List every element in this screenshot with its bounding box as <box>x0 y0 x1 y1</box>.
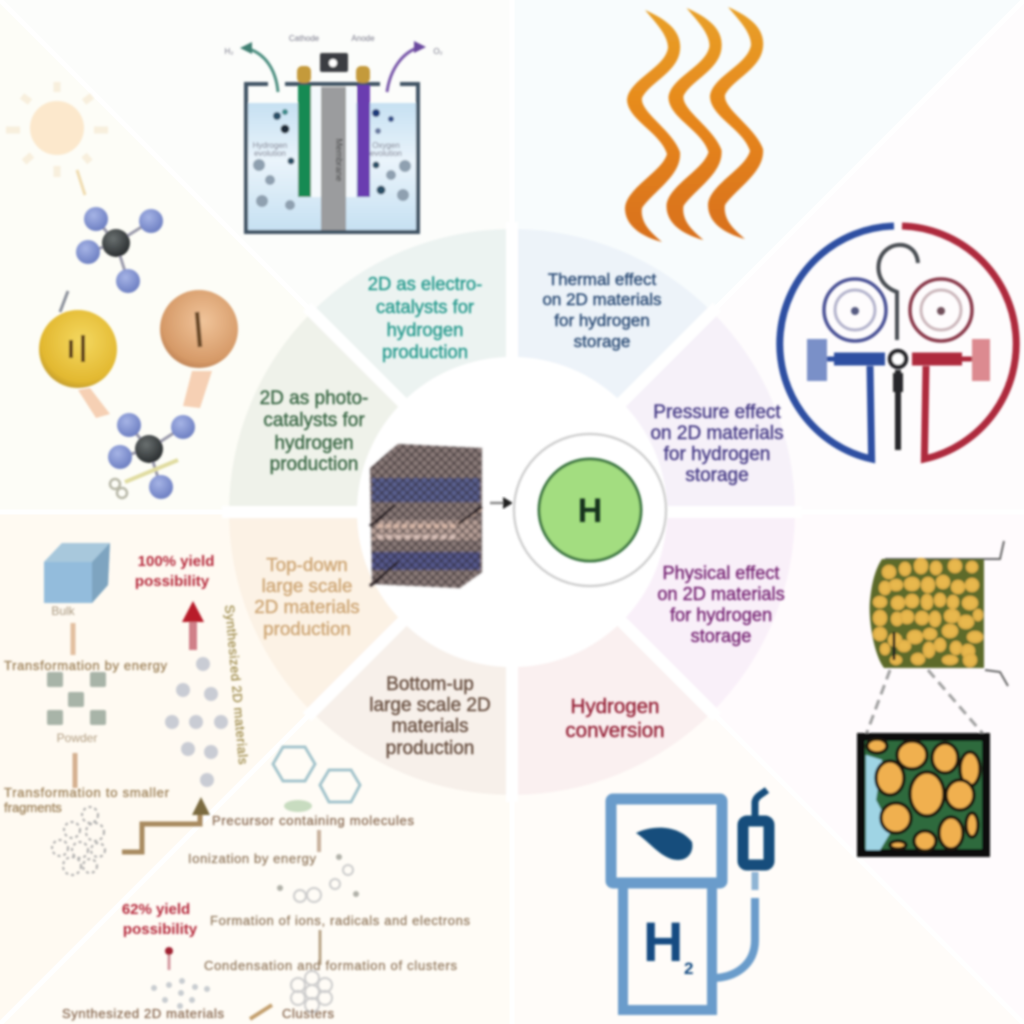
panel: electrolysis cell: Membrane <box>334 138 344 182</box>
segment text: top-down: Top-down <box>266 554 348 575</box>
segment text: pressure effect: for hydrogen <box>664 444 770 465</box>
anode <box>357 85 370 197</box>
powder <box>47 672 106 725</box>
cell labels: O₂ <box>433 47 443 56</box>
bulk label: Bulk <box>51 604 76 618</box>
magnified square <box>861 737 986 853</box>
segment text: physical effect: storage <box>691 626 751 646</box>
62% yield label: possibility <box>123 921 198 938</box>
ionization label: Ionization by energy <box>188 851 316 866</box>
leaf <box>636 828 692 860</box>
grey dots <box>165 657 228 787</box>
62% yield label: 62% yield <box>122 901 190 918</box>
segment text: electrocatalysts: 2D as electro- <box>368 273 482 294</box>
segment text: photocatalysts: 2D as photo- <box>260 388 368 409</box>
cathode <box>298 85 311 197</box>
arrow: O2 <box>387 47 420 92</box>
segment text: bottom-up: Bottom-up <box>386 674 474 695</box>
ring of eight topic segments <box>222 222 802 802</box>
membrane <box>321 87 346 232</box>
cell labels: Hydrogen <box>253 141 287 150</box>
cell labels: Cathode <box>289 34 320 43</box>
icon: hydrogen atom: H <box>578 492 602 530</box>
icon: heat waves <box>625 7 763 242</box>
condensation label: Condensation and formation of clusters <box>204 958 458 973</box>
icon: hydrogen fuel pump <box>611 790 769 1010</box>
hook and stem <box>878 245 918 450</box>
cell labels: evolution <box>370 149 402 158</box>
segment text: bottom-up: materials <box>391 716 469 737</box>
panel: top-down production flow <box>4 543 251 875</box>
arrow <box>70 623 76 655</box>
brown arrow <box>250 1005 272 1019</box>
segment text: pressure effect: on 2D materials <box>650 423 784 444</box>
cell labels: H₂ <box>225 47 233 56</box>
segment text: electrocatalysts: catalysts for <box>376 296 474 317</box>
smaller fragments label: fragments <box>4 800 62 815</box>
segment text: hydrogen conversion: Hydrogen <box>571 695 659 718</box>
sun <box>6 82 108 177</box>
segment text: top-down: production <box>263 618 351 639</box>
segment text: thermal effect: for hydrogen <box>554 311 650 330</box>
arrow: stack to hydrogen <box>490 497 513 509</box>
precursor small molecule <box>284 800 312 812</box>
peach arrows <box>78 371 212 418</box>
H2 subscript: 2 <box>684 959 693 978</box>
electrode caps <box>297 66 370 83</box>
arrow: H2 <box>245 48 278 92</box>
segment text: top-down: large scale <box>262 575 352 596</box>
ions and radicals <box>277 854 359 902</box>
segment text: bottom-up: large scale 2D <box>369 695 491 716</box>
orange sphere <box>160 290 238 368</box>
synthesized label: Synthesized 2D materials <box>62 1006 224 1021</box>
segment text: physical effect: on 2D materials <box>657 584 785 604</box>
smaller fragments label: Transformation to smaller <box>4 785 170 800</box>
cell walls <box>246 84 418 232</box>
segment text: physical effect: Physical effect <box>663 563 779 583</box>
centre: layered 2D material stack <box>370 444 482 588</box>
segment text: top-down: 2D materials <box>254 596 360 617</box>
panel: electrolysis cell <box>225 34 443 232</box>
nozzle <box>743 790 769 865</box>
bubbles <box>273 109 394 194</box>
segment text: photocatalysts: catalysts for <box>263 410 365 431</box>
rotated synthesized label: Synthesized 2D materials <box>222 604 251 765</box>
battery <box>320 53 348 72</box>
segment text: pressure effect: storage <box>685 465 749 486</box>
granule block <box>870 541 1008 686</box>
segment text: thermal effect: Thermal effect <box>548 270 656 289</box>
zoom dashed lines <box>866 670 984 735</box>
cell labels <box>225 34 443 158</box>
formation label: Formation of ions, radicals and electrons <box>210 913 470 928</box>
clusters label: Clusters <box>282 1006 334 1021</box>
segment text: physical effect: for hydrogen <box>670 605 772 625</box>
arrow <box>72 753 78 788</box>
synthesized dots <box>151 978 210 1009</box>
scissors <box>110 460 178 498</box>
cell labels: Anode <box>351 34 375 43</box>
pump body <box>611 799 755 1010</box>
transformation label: Transformation by energy <box>4 658 168 673</box>
icon: pressure manifold gauge <box>780 226 1016 459</box>
precursor label: Precursor containing molecules <box>212 813 414 828</box>
segment text: electrocatalysts: production <box>382 341 468 362</box>
segment text: hydrogen conversion: conversion <box>565 719 665 742</box>
100% yield label: possibility <box>135 573 210 590</box>
precursor hexagons <box>273 747 360 802</box>
molecule: after <box>108 413 195 499</box>
segment text: thermal effect: storage <box>574 332 630 351</box>
molecule: before <box>76 207 163 293</box>
powder label: Powder <box>57 731 97 745</box>
light ray arrow <box>77 170 85 195</box>
cell labels: evolution <box>254 149 286 158</box>
panel: photocatalysis <box>6 82 238 499</box>
yellow sphere <box>39 291 117 388</box>
bulk cube <box>44 543 110 603</box>
connector <box>318 930 322 965</box>
segment text: photocatalysts: production <box>270 454 358 475</box>
fragments dots <box>52 807 105 875</box>
segment text: bottom-up: production <box>386 738 474 759</box>
segment text: photocatalysts: hydrogen <box>274 433 354 454</box>
clusters <box>291 971 332 1012</box>
panel: bottom-up production flow <box>62 747 470 1021</box>
segment text: thermal effect: on 2D materials <box>542 290 662 309</box>
cell labels: Oxygen <box>372 141 400 150</box>
stair arrow <box>122 797 210 852</box>
segment text: pressure effect: Pressure effect <box>653 402 781 423</box>
100% yield label: 100% yield <box>138 553 214 570</box>
icon: hydrogen atom <box>514 434 666 586</box>
connector <box>317 830 321 852</box>
blue side <box>780 226 894 459</box>
small red arrow <box>165 947 173 970</box>
icon: porous material <box>861 541 1008 853</box>
white gaps beside membrane <box>311 87 356 197</box>
red arrow <box>182 601 204 650</box>
H2 label: H <box>643 910 683 973</box>
red side <box>902 226 1016 459</box>
segment text: electrocatalysts: hydrogen <box>387 319 463 340</box>
